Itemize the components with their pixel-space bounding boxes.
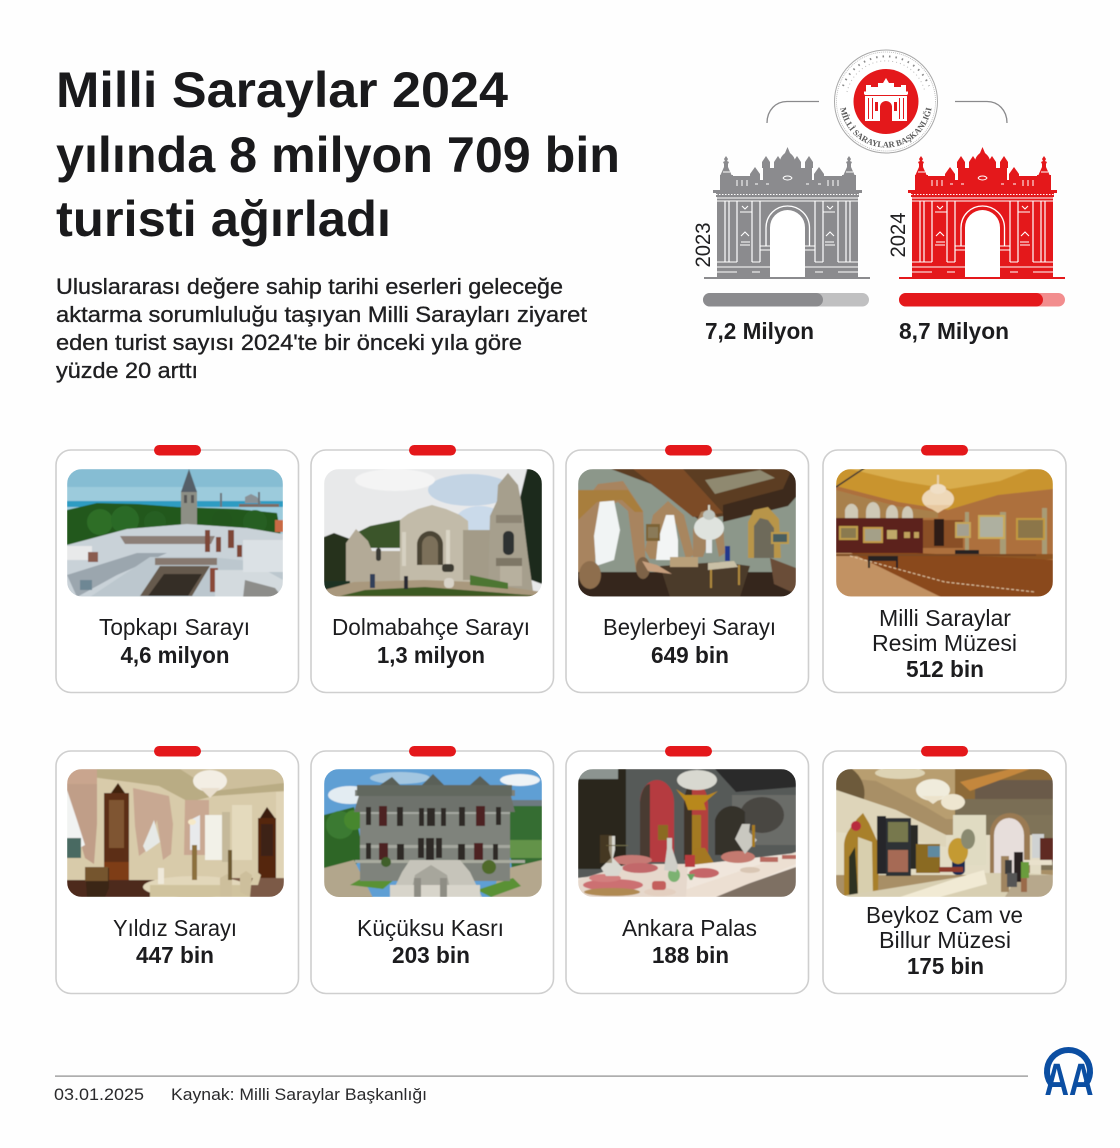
photo: Beykoz	[836, 767, 1053, 897]
photo: Dolmabahçe	[324, 469, 542, 597]
label: Billur Müzesi	[879, 927, 1011, 953]
photo: Küçüksu	[324, 769, 542, 900]
bar: 2024	[899, 293, 1065, 306]
intro text: yüzde 20 arttı	[56, 358, 198, 383]
label: Ankara Palas	[622, 915, 757, 941]
panel: Yıldız Sarayı	[56, 746, 298, 994]
value: 512 bin	[906, 656, 984, 682]
panel: Beylerbeyi Sarayı	[566, 445, 808, 692]
title: Milli Saraylar 2024	[56, 62, 508, 118]
value: 4,6 milyon	[120, 642, 230, 668]
panel: Küçüksu Kasrı	[311, 746, 554, 994]
connector: left	[767, 102, 819, 123]
label: Beylerbeyi Sarayı	[603, 614, 776, 640]
intro text: aktarma sorumluluğu taşıyan Milli Sarayları ziyaret	[56, 302, 587, 327]
label: Resim Müzesi	[872, 630, 1017, 656]
photo: Ankara Palas	[578, 769, 796, 897]
label: Beykoz Cam ve	[866, 902, 1023, 928]
panel: Topkapı Sarayı	[56, 445, 298, 692]
label: Küçüksu Kasrı	[357, 915, 504, 941]
title: turisti ağırladı	[56, 191, 391, 247]
label: Dolmabahçe Sarayı	[332, 614, 530, 640]
value: 447 bin	[136, 942, 214, 968]
photo: Topkapı	[67, 469, 283, 598]
intro text	[56, 274, 587, 383]
intro text: Uluslararası değere sahip tarihi eserleri geleceğe	[56, 274, 563, 299]
label	[866, 902, 1023, 953]
panel: Beykoz Cam ve Billur Müzesi	[823, 746, 1066, 994]
value: 1,3 milyon	[377, 642, 485, 668]
bar: 2023	[703, 293, 869, 306]
panel: Ankara Palas	[566, 746, 808, 994]
photo: Resim Müzesi	[836, 467, 1053, 597]
value: 203 bin	[392, 942, 470, 968]
icon: Milli Saraylar seal	[834, 50, 938, 154]
logo: AA: AA	[1044, 1054, 1094, 1105]
year label 2024: 2024	[886, 212, 910, 258]
year label 2023: 2023	[691, 222, 715, 268]
photo: Yıldız	[67, 769, 284, 898]
value: 175 bin	[907, 953, 984, 979]
intro text: eden turist sayısı 2024'te bir önceki yıla göre	[56, 330, 522, 355]
label: Yıldız Sarayı	[113, 915, 237, 941]
icon: 2023 gate	[704, 147, 870, 279]
icon: 2024 gate	[899, 147, 1065, 279]
label: Topkapı Sarayı	[99, 614, 250, 640]
photo: Beylerbeyi	[578, 469, 796, 597]
title	[56, 62, 620, 247]
value 2024: 8,7 Milyon	[899, 318, 1009, 344]
panel: Dolmabahçe Sarayı	[311, 445, 554, 692]
value: 649 bin	[651, 642, 729, 668]
value 2023: 7,2 Milyon	[705, 318, 814, 344]
footer date: 03.01.2025	[54, 1085, 144, 1104]
icon: Milli Saraylar seal: MİLLİ SARAYLAR BAŞKANLIĞI	[840, 107, 932, 148]
footer line	[55, 1076, 1028, 1077]
title: yılında 8 milyon 709 bin	[56, 127, 620, 183]
footer source: Kaynak: Milli Saraylar Başkanlığı	[171, 1085, 427, 1104]
value: 188 bin	[652, 942, 729, 968]
connector: right	[955, 102, 1007, 123]
panel: Milli Saraylar Resim Müzesi	[823, 445, 1066, 692]
label	[872, 605, 1017, 656]
label: Milli Saraylar	[879, 605, 1011, 631]
